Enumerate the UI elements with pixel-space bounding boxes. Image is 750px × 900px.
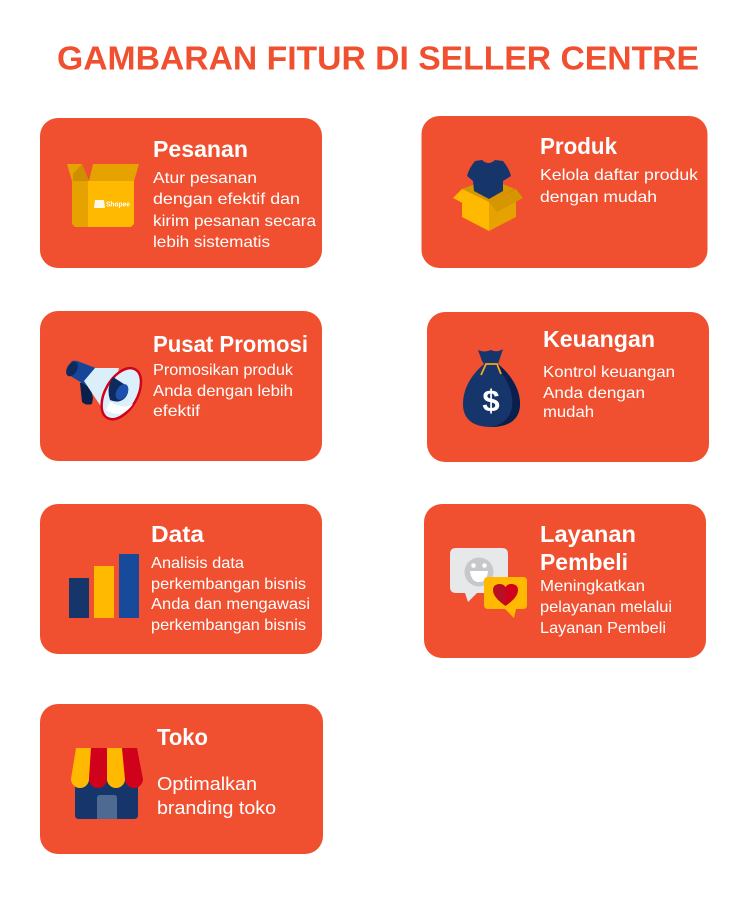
text: Data description	[151, 555, 310, 634]
icon: bar chart	[69, 554, 139, 618]
card background: Toko	[40, 704, 323, 854]
panel: Keuangan	[427, 312, 709, 462]
card background: Keuangan	[427, 312, 709, 462]
icon: money bag: $	[482, 383, 500, 418]
heading: Keuangan: Keuangan	[543, 326, 655, 352]
icon: megaphone	[64, 360, 149, 426]
text: Layanan Pembeli description: Meningkatkan	[540, 578, 645, 595]
icon: Shopee box	[67, 164, 139, 227]
icon: money bag	[463, 349, 520, 427]
title: GAMBARAN FITUR DI SELLER CENTRE	[57, 40, 699, 78]
card background: Pusat Promosi	[40, 311, 322, 461]
heading: Data: Data	[151, 521, 204, 547]
text: Pesanan description: kirim pesanan secara	[153, 213, 316, 230]
icon: Shopee box: Shopee	[106, 202, 130, 208]
text: Keuangan description	[543, 364, 675, 421]
heading: Layanan Pembeli: Layanan	[540, 521, 636, 547]
panel: Produk	[422, 116, 708, 268]
card background: Pesanan	[40, 118, 322, 268]
heading: Produk: Produk	[540, 133, 617, 159]
panel: Data	[40, 504, 322, 654]
text: Pusat Promosi description: efektif	[153, 403, 201, 420]
text: Layanan Pembeli description: pelayanan melalui	[540, 599, 672, 616]
icon: open box with shirt	[453, 160, 523, 231]
heading: Pusat Promosi: Pusat Promosi	[153, 331, 308, 357]
heading: Pesanan: Pesanan	[153, 136, 248, 162]
card background: Produk	[422, 116, 708, 268]
panel: Pesanan	[40, 118, 322, 268]
text: Pesanan description: lebih sistematis	[153, 234, 270, 251]
icon: chat bubbles	[450, 548, 527, 618]
text: Pusat Promosi description: Anda dengan lebih	[153, 383, 293, 400]
panel: Toko	[40, 704, 323, 854]
text: Toko description	[157, 774, 276, 818]
text: Produk description: dengan mudah	[540, 189, 657, 206]
heading: Toko: Toko	[157, 724, 208, 750]
text: Pesanan description	[153, 170, 316, 251]
card background: Data	[40, 504, 322, 654]
heading: Layanan Pembeli: Pembeli	[540, 549, 628, 575]
text: Produk description	[540, 167, 699, 206]
text: Pusat Promosi description: Promosikan produk	[153, 362, 294, 379]
text: Toko description: branding toko	[157, 798, 276, 818]
text: Keuangan description: Anda dengan	[543, 385, 645, 402]
text: Data description: perkembangan bisnis	[151, 617, 306, 634]
text: Toko description: Optimalkan	[157, 774, 257, 794]
panel: Pusat Promosi	[40, 311, 322, 461]
text: Data description: perkembangan bisnis	[151, 576, 306, 593]
text: Keuangan description: mudah	[543, 404, 594, 421]
panel: Layanan Pembeli	[424, 504, 706, 658]
card background: Layanan Pembeli	[424, 504, 706, 658]
icon: storefront	[71, 748, 143, 819]
text: Keuangan description: Kontrol keuangan	[543, 364, 675, 381]
text: Pusat Promosi description	[153, 362, 294, 420]
text: Data description: Anda dan mengawasi	[151, 596, 310, 613]
text: Pesanan description: dengan efektif dan	[153, 191, 300, 208]
text: Layanan Pembeli description: Layanan Pembeli	[540, 620, 666, 637]
text: Produk description: Kelola daftar produk	[540, 167, 699, 184]
heading: Layanan Pembeli	[540, 521, 636, 575]
text: Data description: Analisis data	[151, 555, 244, 572]
text: Layanan Pembeli description	[540, 578, 672, 637]
text: Pesanan description: Atur pesanan	[153, 170, 257, 187]
